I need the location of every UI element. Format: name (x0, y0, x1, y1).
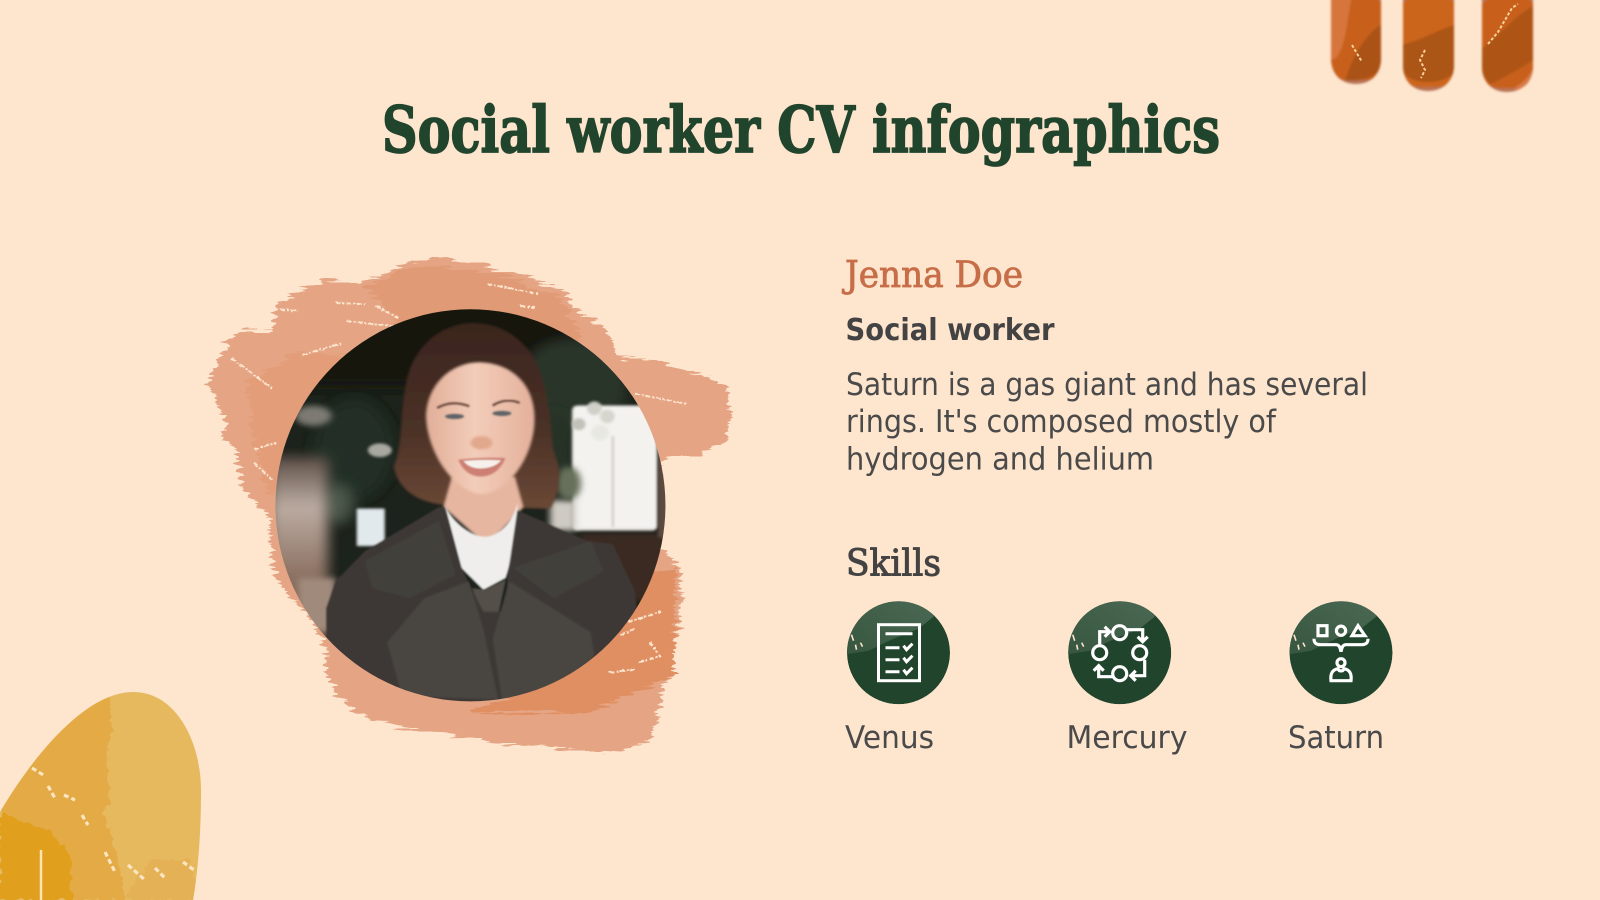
eyebrows, eyes, nose and smile (437, 401, 520, 477)
icon: decision shapes and person (1290, 601, 1392, 704)
name: Jenna Doe (841, 255, 1023, 296)
photo (269, 297, 672, 710)
decoration: yellow brush shape bottom left (0, 680, 210, 900)
skill: Mercury (1065, 593, 1188, 756)
title: Social worker CV infographics (382, 93, 1220, 168)
hair (394, 323, 559, 509)
brush stroke behind photo (208, 259, 731, 754)
job title: Social worker (846, 313, 1055, 348)
label: Venus (845, 720, 934, 756)
description text: rings. It's composed mostly of (846, 404, 1277, 440)
description text (846, 367, 1368, 478)
skill: Saturn (1290, 601, 1392, 748)
decoration: orange brush bars top right (1325, 0, 1538, 95)
portrait: brush stroke and circular photo (208, 259, 731, 754)
shirt (445, 504, 519, 590)
description text: hydrogen and helium (846, 442, 1154, 478)
description text: Saturn is a gas giant and has several (846, 367, 1368, 403)
icon: checklist (847, 601, 950, 704)
label: Mercury (1066, 720, 1188, 756)
icon: process cycle (1065, 593, 1171, 704)
sweater (472, 580, 506, 612)
coat (326, 507, 637, 703)
skills heading: Skills (846, 544, 941, 584)
label: Saturn (1288, 720, 1384, 756)
skill: Venus (845, 601, 950, 748)
neck (443, 477, 523, 546)
face (426, 362, 534, 494)
decoration: bar scratches (1352, 4, 1518, 78)
coat lapels (365, 521, 604, 598)
